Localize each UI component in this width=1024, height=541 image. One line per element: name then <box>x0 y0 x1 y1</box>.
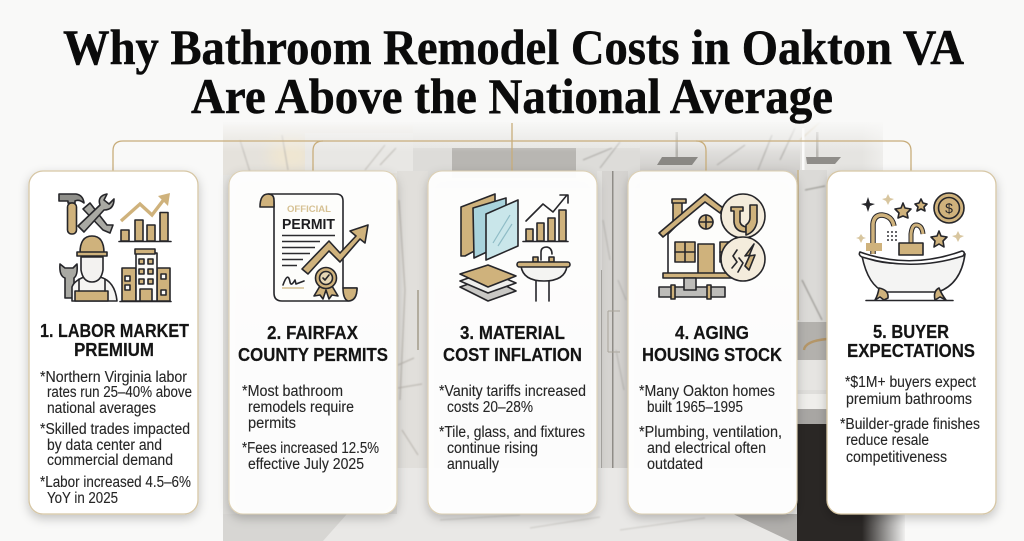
bullet text: commercial demand <box>47 452 173 469</box>
bullet text: premium bathrooms <box>846 391 972 408</box>
heading: 5. BUYER <box>873 321 949 342</box>
bullet text: YoY in 2025 <box>47 490 118 507</box>
bullet text: outdated <box>647 456 703 473</box>
connector lines linking title to cards <box>113 123 911 172</box>
panel: 1 labor market premium <box>29 171 198 514</box>
heading: PREMIUM <box>74 339 154 360</box>
bullet text: reduce resale <box>846 432 929 449</box>
bullet text: and electrical often <box>647 440 766 457</box>
bullet text: permits <box>248 415 296 432</box>
heading: 3. MATERIAL <box>460 322 565 343</box>
heading: 2. FAIRFAX <box>267 322 359 343</box>
bullet text: *Plumbing, ventilation, <box>639 424 782 441</box>
bullet text: *Vanity tariffs increased <box>439 383 586 400</box>
icon: official permit document: OFFICIAL <box>287 204 331 215</box>
panel: 4 aging housing stock <box>628 171 797 514</box>
bullet text: *Tile, glass, and fixtures <box>439 424 585 441</box>
bullet text: by data center and <box>47 437 162 454</box>
icon: materials, chart and sink <box>460 194 570 301</box>
background photo: marble bathroom <box>223 120 1024 541</box>
bullet text: built 1965–1995 <box>647 399 743 416</box>
bullet text: *Skilled trades impacted <box>40 421 190 438</box>
bullet text <box>639 383 782 473</box>
icon: tools, chart, worker and building <box>59 193 171 302</box>
title <box>63 19 964 124</box>
bullet text: *Northern Virginia labor <box>40 369 187 386</box>
bullet text: costs 20–28% <box>447 399 533 416</box>
bullet text: continue rising <box>447 440 538 457</box>
bullet text: effective July 2025 <box>248 456 364 473</box>
bullet text: remodels require <box>248 399 354 416</box>
bullet text: *$1M+ buyers expect <box>845 374 977 391</box>
icon: official permit document: PERMIT <box>282 216 335 233</box>
bullet text: national averages <box>47 400 156 417</box>
panel: 5 buyer expectations <box>827 171 996 514</box>
heading: COST INFLATION <box>443 344 582 365</box>
heading: COUNTY PERMITS <box>238 344 388 365</box>
bullet text: *Fees increased 12.5% <box>242 440 379 457</box>
icon: official permit document <box>260 194 368 301</box>
heading <box>847 321 975 361</box>
bullet text: competitiveness <box>846 449 947 466</box>
icon: premium bathtub with stars and coin <box>856 193 965 300</box>
heading: EXPECTATIONS <box>847 340 975 361</box>
bullet text <box>439 383 586 473</box>
bullet text: *Labor increased 4.5–6% <box>40 474 191 491</box>
title: Are Above the National Average <box>191 68 833 124</box>
panel: 3 material cost inflation <box>428 171 597 514</box>
heading <box>443 322 582 365</box>
heading: 4. AGING <box>675 322 749 343</box>
bullet text: *Many Oakton homes <box>639 383 775 400</box>
heading: HOUSING STOCK <box>642 344 783 365</box>
title: Why Bathroom Remodel Costs in Oakton VA <box>63 19 964 75</box>
heading <box>40 320 190 360</box>
bullet text <box>840 374 980 466</box>
bullet text: *Most bathroom <box>242 383 343 400</box>
bullet text <box>40 369 192 507</box>
panel: 2 fairfax county permits <box>229 171 397 514</box>
bullet text: rates run 25–40% above <box>47 384 192 401</box>
bullet text <box>242 383 379 473</box>
icon: old house with plumbing and electrical <box>659 194 765 299</box>
heading: 1. LABOR MARKET <box>40 320 190 341</box>
bullet text: annually <box>447 456 499 473</box>
heading <box>238 322 388 365</box>
heading <box>642 322 783 365</box>
icon: premium bathtub with stars and coin: $ <box>945 200 953 216</box>
bullet text: *Builder-grade finishes <box>840 416 980 433</box>
